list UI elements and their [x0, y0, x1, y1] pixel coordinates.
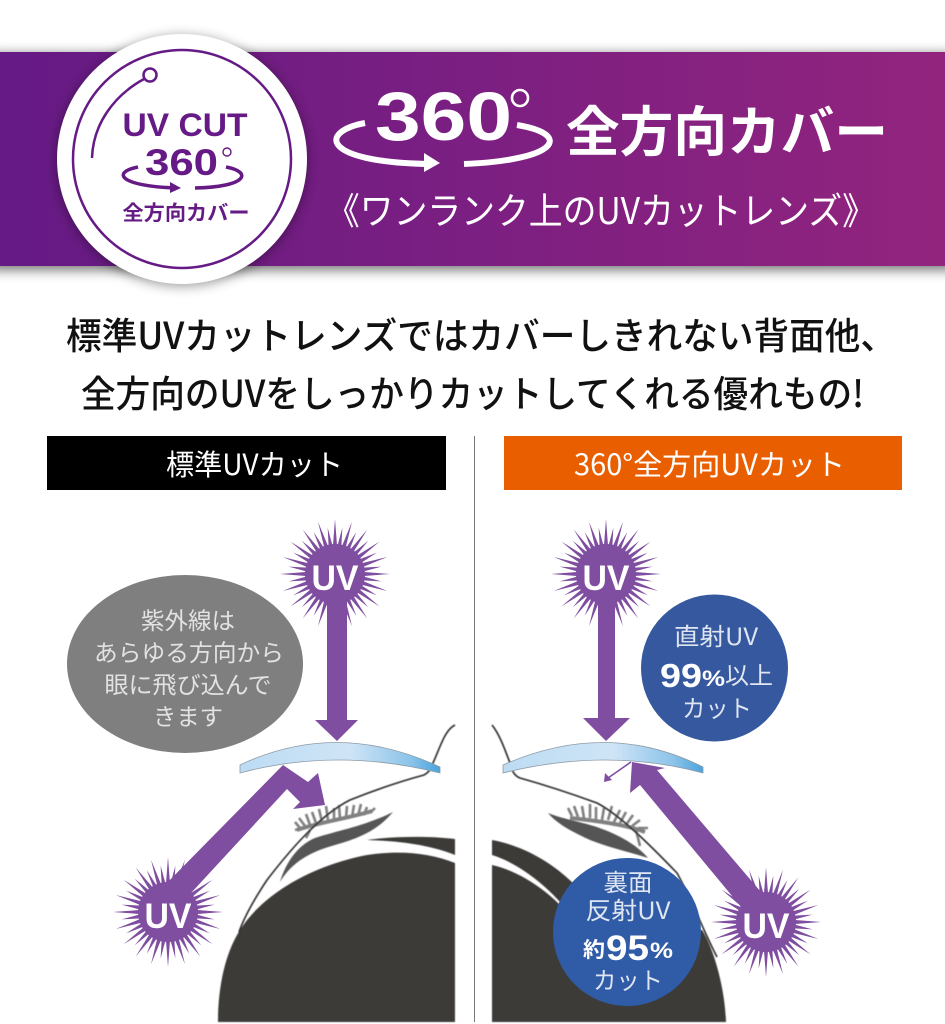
arrow: direct UV down: [583, 600, 630, 741]
icon: UV burst top: UV: [582, 559, 630, 598]
callout: back reflection UV 95%: 約: [583, 934, 605, 964]
arrow: back-side UV: [630, 762, 772, 920]
eye illustration left: [218, 725, 455, 1022]
center divider: [474, 436, 475, 1022]
banner: [0, 52, 945, 270]
icon: large 360 degree rotation: [336, 78, 550, 172]
panel: 360 degree UV cut diagram: [492, 519, 821, 1022]
lens left: [240, 742, 440, 773]
callout: direct UV 99%: 直射UV: [674, 617, 758, 652]
arrow: small reflected arrow: [604, 762, 631, 782]
banner title: 全方向カバー: [566, 88, 888, 167]
badge: UV CUT 360: 360: [145, 142, 218, 183]
panel header: standard UV cut: [47, 436, 446, 490]
arrow: reflected UV bent: [160, 765, 325, 905]
callout: UV comes from every direction: 眼に飛び込んで: [104, 666, 272, 700]
panel header: standard UV cut: 標準UVカット: [166, 442, 343, 484]
icon: UV burst top: [280, 519, 390, 629]
eye illustration right: [492, 725, 726, 1022]
callout: back reflection UV 95%: 95: [606, 929, 649, 968]
icon: UV burst bottom: UV: [144, 897, 192, 936]
badge: UV CUT 360: [57, 34, 307, 286]
callout: back reflection UV 95%: 裏面: [604, 863, 652, 898]
icon: UV burst bottom: [113, 857, 223, 967]
callout: back reflection UV 95%: [553, 858, 701, 1006]
icon: UV burst bottom: [711, 867, 821, 977]
icon: UV burst bottom: UV: [742, 907, 790, 946]
heading: 標準UVカットレンズではカバーしきれない背面他、: [66, 306, 896, 360]
heading: [66, 306, 896, 418]
callout: back reflection UV 95%: カット: [593, 961, 663, 996]
icon: UV burst top: UV: [312, 559, 359, 598]
panel: standard UV cut diagram: [67, 519, 455, 1022]
callout: direct UV 99%: [641, 594, 788, 742]
callout: UV comes from every direction: あらゆる方向から: [94, 634, 284, 668]
icon: large 360 degree rotation: 360: [375, 78, 512, 155]
callout: direct UV 99%: 以上: [725, 656, 773, 691]
lens right: [503, 742, 703, 773]
heading: 全方向のUVをしっかりカットしてくれる優れもの!: [81, 364, 864, 418]
callout: back reflection UV 95%: 反射UV: [586, 891, 671, 926]
callout: UV comes from every direction: きます: [153, 698, 223, 732]
panel header: 360 degree UV cut: [504, 436, 902, 490]
badge: UV CUT 360: UV CUT: [122, 107, 248, 143]
callout: UV comes from every direction: [67, 575, 303, 753]
callout: UV comes from every direction: 紫外線は: [141, 602, 235, 636]
callout: direct UV 99%: 99: [660, 657, 702, 694]
arrow: direct UV down: [315, 600, 358, 741]
badge: UV CUT 360: 全方向カバー: [122, 196, 250, 226]
icon: UV burst top: [551, 519, 661, 629]
callout: direct UV 99%: %: [702, 666, 725, 691]
panel header: 360 degree UV cut: 360°全方向UVカット: [574, 442, 845, 484]
callout: back reflection UV 95%: %: [650, 938, 673, 963]
banner subtitle: 《ワンランク上のUVカットレンズ》: [326, 181, 876, 235]
callout: direct UV 99%: カット: [682, 689, 752, 724]
